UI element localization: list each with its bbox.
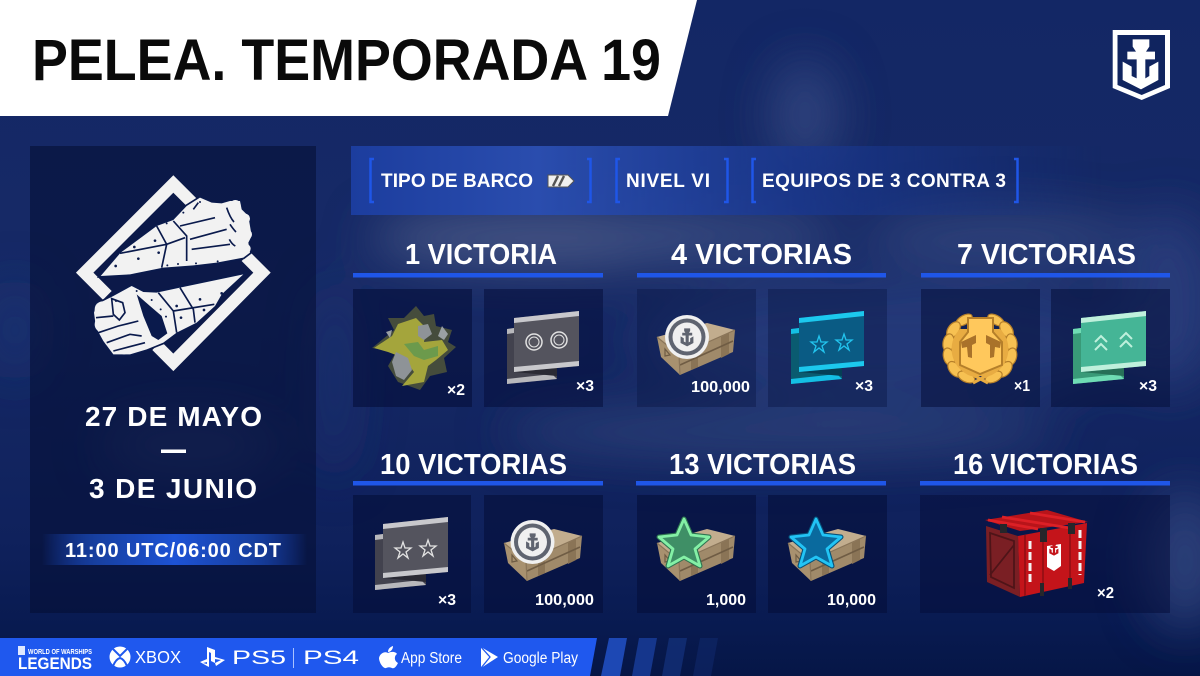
laurel wreath [941,312,1019,385]
reward: blue star crate 10,000: 10,000 [827,592,876,609]
title: PELEA. TEMPORADA 19 [32,28,661,93]
logo: legends: WORLD OF WARSHIPS [28,647,92,656]
panel: 16 victorias: 16 VICTORIAS [953,449,1138,481]
tag: ship type: TIPO DE BARCO [381,171,533,192]
platform: xbox: XBOX [135,647,181,667]
panel: 16 victorias [920,449,1170,613]
panel: 13 victorias [636,449,887,613]
logo: shield [1113,30,1170,100]
start date: 27 DE MAYO [85,401,262,432]
panel: 4 victorias: 4 VICTORIAS [671,239,852,271]
reward: red container x2 [920,495,1170,613]
panel: 10 victorias: 10 VICTORIAS [380,449,567,481]
icon: fists in diamond [85,184,262,362]
reward: blue star signal x3 [768,289,887,407]
reward: credit signal x3: ×3 [576,378,594,395]
decorative slanted stripes [601,638,718,676]
shield [960,318,1002,374]
tag: team size: EQUIPOS DE 3 CONTRA 3 [762,171,1006,192]
platform: google play: Google Play [503,650,578,667]
panel: 7 victorias [921,239,1170,407]
reward: camouflage x2 [353,289,472,407]
icon: ship type [548,175,574,187]
reward: silver star signal x3: ×3 [438,592,456,609]
platform: xbox [110,646,181,668]
panel: 13 victorias: 13 VICTORIAS [669,449,856,481]
tag: tier: NIVEL VI [626,171,710,192]
logo: legends: LEGENDS [18,654,92,673]
time band [42,534,307,565]
reward: blue star signal x3: ×3 [855,378,873,395]
platform: app store [379,646,462,668]
reward: credits crate 100,000 [637,289,756,407]
logo: legends [18,646,92,673]
reward: red container x2: ×2 [1097,585,1114,602]
time band: 11:00 UTC/06:00 CDT [65,540,281,562]
tag: tier [616,159,728,202]
panel: match conditions [351,146,1101,215]
reward: camouflage x2: ×2 [447,382,465,399]
panel: 1 victoria [353,239,603,407]
panel: 7 victorias: 7 VICTORIAS [957,239,1136,271]
panel: 1 victoria: 1 VICTORIA [405,239,557,271]
reward: gold medal x1: ×1 [1014,378,1030,395]
date dash [161,450,186,453]
reward: credits crate 100,000 [484,495,603,613]
platform: playstation: PS5 [232,648,286,669]
reward: credit signal x3 [484,289,603,407]
reward: silver star signal x3 [353,495,471,613]
panel: 10 victorias [353,449,603,613]
title banner [0,0,697,116]
platform: google play [481,647,578,668]
reward: blue star crate 10,000 [768,495,887,613]
reward: green star crate 1,000: 1,000 [706,592,746,609]
reward: credits crate 100,000: 100,000 [535,592,594,609]
panel: event dates [30,146,316,613]
reward: green signal x3 [1051,289,1170,407]
footer bar [0,638,718,676]
reward: credits crate 100,000: 100,000 [691,379,750,396]
reward: green star crate 1,000 [637,495,756,613]
end date: 3 DE JUNIO [89,473,257,504]
platform: playstation [200,647,360,669]
platform: app store: App Store [401,650,462,667]
reward: green signal x3: ×3 [1139,378,1157,395]
panel: 4 victorias [637,239,887,407]
tag: team size [752,159,1018,202]
platform: playstation: PS4 [303,648,360,669]
reward: gold medal x1 [921,289,1040,407]
tag: ship type [370,159,590,202]
